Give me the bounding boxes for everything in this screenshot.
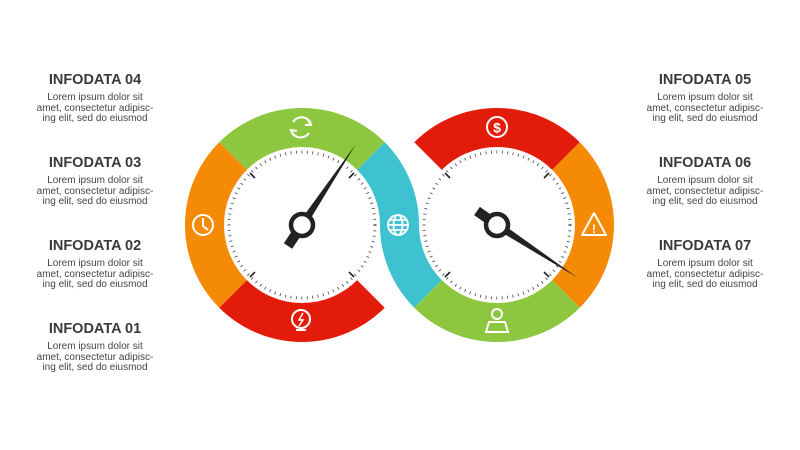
text block: infodata 06: amet, consectetur adipisc-	[647, 186, 763, 197]
text block: infodata 02: Lorem ipsum dolor sit	[47, 258, 143, 269]
text block: infodata 01: ing elit, sed do eiusmod	[42, 362, 148, 373]
icon: refresh	[291, 117, 311, 137]
left ring segments	[205, 128, 371, 322]
icon: bulb	[292, 310, 310, 330]
icon: dollar: $	[493, 120, 501, 136]
icon: dollar	[487, 117, 507, 137]
text block: infodata 04: Lorem ipsum dolor sit	[47, 92, 143, 103]
text block: infodata 05: Lorem ipsum dolor sit	[657, 92, 753, 103]
text block: infodata 06: ing elit, sed do eiusmod	[652, 196, 758, 207]
text block: infodata 04: amet, consectetur adipisc-	[37, 103, 153, 114]
text block: infodata 02: ing elit, sed do eiusmod	[42, 279, 148, 290]
text block: infodata 04: INFODATA 04	[49, 72, 141, 88]
text block: infodata 07: ing elit, sed do eiusmod	[652, 279, 758, 290]
text block: infodata 07: amet, consectetur adipisc-	[647, 269, 763, 280]
text block: infodata 05: ing elit, sed do eiusmod	[652, 113, 758, 124]
text block: infodata 06: Lorem ipsum dolor sit	[657, 175, 753, 186]
text block: infodata 01: amet, consectetur adipisc-	[37, 352, 153, 363]
text block: infodata 03	[37, 155, 153, 207]
text block: infodata 06: INFODATA 06	[659, 155, 751, 171]
icon: warning: !	[592, 222, 596, 236]
cyan connector	[371, 156, 428, 294]
text block: infodata 03: amet, consectetur adipisc-	[37, 186, 153, 197]
text block: infodata 03: INFODATA 03	[49, 155, 141, 171]
text block: infodata 04: ing elit, sed do eiusmod	[42, 113, 148, 124]
text block: infodata 03: ing elit, sed do eiusmod	[42, 196, 148, 207]
text block: infodata 07: Lorem ipsum dolor sit	[657, 258, 753, 269]
text block: infodata 05: amet, consectetur adipisc-	[647, 103, 763, 114]
text block: infodata 01: INFODATA 01	[49, 321, 141, 337]
icon: globe	[388, 215, 408, 235]
left needle	[288, 144, 356, 246]
text block: infodata 02	[37, 238, 153, 290]
text block: infodata 07	[647, 238, 763, 290]
text block: infodata 05: INFODATA 05	[659, 72, 751, 88]
icon: clock	[193, 215, 213, 235]
right ring segments	[428, 128, 594, 322]
text block: infodata 02: INFODATA 02	[49, 238, 141, 254]
icon: warning	[582, 213, 606, 236]
tick marks	[229, 152, 570, 298]
icon: person	[486, 309, 508, 332]
right needle	[477, 211, 578, 278]
text block: infodata 03: Lorem ipsum dolor sit	[47, 175, 143, 186]
text block: infodata 07: INFODATA 07	[659, 238, 751, 254]
text block: infodata 01: Lorem ipsum dolor sit	[47, 341, 143, 352]
text block: infodata 06	[647, 155, 763, 207]
text block: infodata 02: amet, consectetur adipisc-	[37, 269, 153, 280]
text block: infodata 04	[37, 72, 153, 124]
text block: infodata 05	[647, 72, 763, 124]
text block: infodata 01	[37, 321, 153, 373]
